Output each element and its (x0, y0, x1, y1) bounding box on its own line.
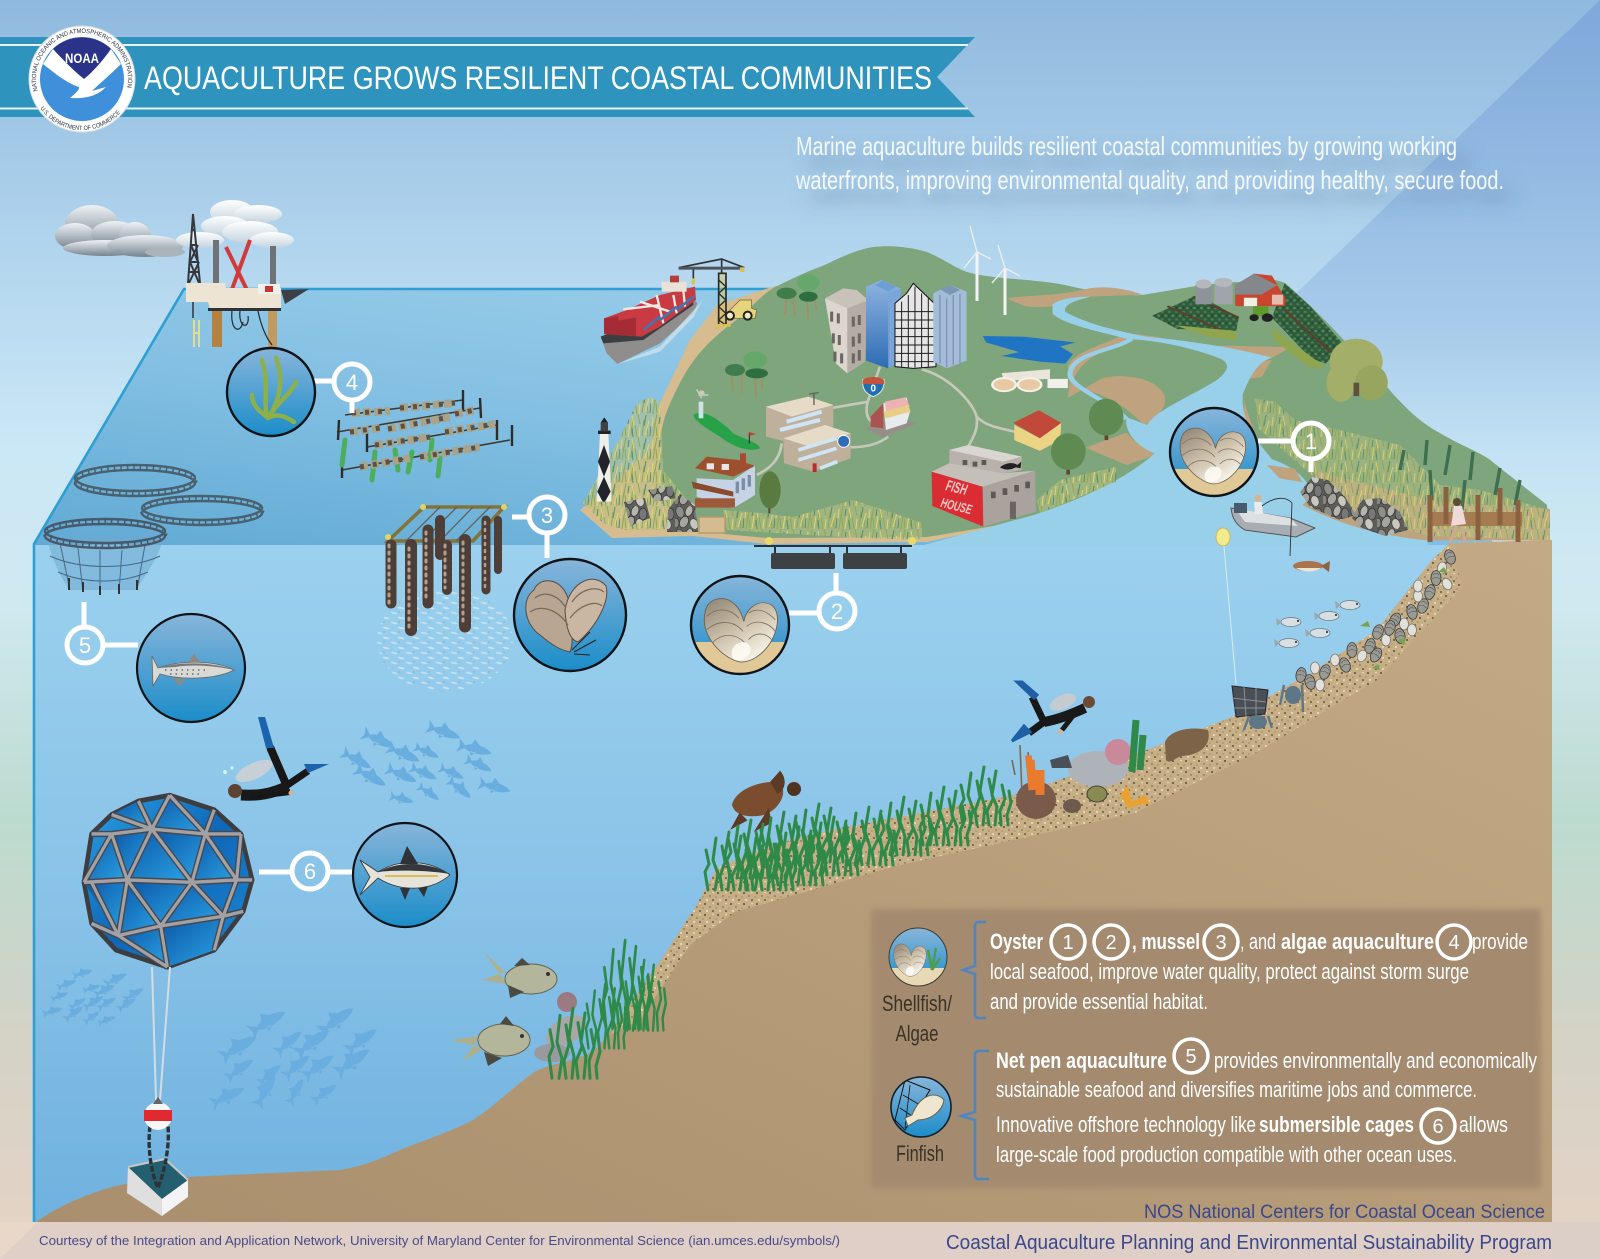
crane (679, 258, 744, 327)
wetland pond (983, 336, 1076, 364)
palm trees upper (777, 274, 820, 319)
badge 5: 5 (79, 633, 91, 658)
legend numerals bottom (1185, 1046, 1444, 1138)
tree: cypress (759, 471, 781, 513)
legend numerals top: 4 (1448, 932, 1460, 954)
dark reeds on right bank (1400, 440, 1520, 510)
legend number badges top (1051, 925, 1471, 959)
legend text: finfish: allows (1459, 1112, 1508, 1137)
legend label: shellfish algae (882, 991, 953, 1046)
oil rig platform (186, 214, 309, 347)
legend numerals bottom: 5 (1185, 1046, 1197, 1068)
mooring buoy (144, 1097, 172, 1130)
bottom credit band (0, 1222, 1600, 1259)
NOAA logo: U.S. DEPARTMENT OF COMMERCE (40, 106, 120, 130)
scuba diver left (223, 717, 329, 798)
badge 4: 4 (346, 370, 358, 395)
silos and barn (1195, 274, 1286, 306)
mussel raft (385, 504, 507, 541)
legend text: shellfish: Oyster (990, 929, 1043, 954)
cloud: white (176, 200, 294, 248)
fish house shore marsh (1037, 467, 1116, 513)
legend number badges bottom (1174, 1039, 1455, 1143)
badge 6: 6 (304, 859, 316, 884)
river mud flats (1007, 287, 1550, 540)
legend brace bottom (961, 1051, 989, 1179)
wind turbines (964, 226, 1020, 315)
interstate shield: 0 (871, 383, 877, 394)
legend label: shellfish algae: Shellfish/ (882, 991, 953, 1016)
legend text: shellfish: local seafood, improve water quality, protect against storm surge (990, 959, 1469, 984)
fish house: HOUSE (939, 495, 974, 517)
net pen front (45, 519, 165, 595)
palm trees lower (725, 351, 768, 397)
silver fish (1274, 600, 1360, 648)
buoy and crab pot line (1216, 528, 1268, 717)
connector lines (84, 381, 1311, 872)
bulldozer (726, 300, 757, 320)
container ship (601, 276, 702, 364)
skyscraper: blue (866, 280, 901, 368)
intro text (795, 131, 1504, 195)
fish school upper (339, 717, 513, 807)
green tractor (1249, 306, 1273, 322)
roads (757, 367, 1015, 475)
NOAA logo: NATIONAL OCEANIC AND ATMOSPHERIC ADMINISTRATION (32, 28, 132, 92)
credit: courtesy: Courtesy of the Integration and Application Network, University of Maryland Center for Environmental Science (ian.umces.edu/symbols/) (39, 1233, 840, 1248)
legend text: finfish: submersible cages (1259, 1112, 1414, 1137)
gravel band (610, 543, 1462, 1035)
waterfront house (692, 453, 755, 508)
pale forage fish school (377, 588, 513, 692)
small pier (699, 517, 725, 533)
legend text: shellfish: algae aquaculture (1281, 929, 1434, 954)
badge 6 (292, 853, 328, 889)
badge 3: 3 (541, 503, 553, 528)
legend brace top (963, 922, 986, 1018)
mooring block (127, 1159, 188, 1216)
lighthouse (597, 417, 612, 502)
mooring lines (152, 967, 170, 1100)
shop (865, 397, 917, 437)
credit: program: Coastal Aquaculture Planning and Environmental Sustainability Program (946, 1232, 1552, 1254)
oyster reef on river shore (1300, 477, 1408, 536)
legend text: finfish: Innovative offshore technology like (996, 1112, 1256, 1137)
legend text: shellfish: , mussel (1132, 929, 1200, 954)
legend text: finfish (996, 1048, 1537, 1167)
legend text: shellfish: , and (1240, 929, 1276, 954)
legend icon: finfish (891, 1077, 951, 1137)
willow tree (1327, 339, 1388, 402)
banner title text: AQUACULTURE GROWS RESILIENT COASTAL COMMUNITIES (144, 60, 932, 96)
badge 4 (334, 364, 370, 400)
legend numerals top: 1 (1062, 932, 1074, 954)
net pen back right (142, 496, 262, 525)
tree: right of house (1089, 399, 1123, 440)
mooring chain (149, 1126, 168, 1188)
island green hill (659, 246, 1550, 540)
legend text: shellfish: provide (1472, 929, 1528, 954)
fish school lower centre (207, 1000, 381, 1111)
red drum fish on line (1293, 561, 1330, 572)
hanging mussel ropes (389, 520, 498, 630)
net pen back left (75, 465, 195, 496)
fish house (932, 445, 1036, 527)
callout 5: salmon circle (137, 614, 245, 722)
background diagonal facet (1020, 0, 1600, 560)
flounder (1165, 728, 1209, 762)
NOAA logo (28, 26, 136, 132)
badge 1: 1 (1305, 429, 1317, 454)
NOAA logo: NOAA (65, 50, 99, 66)
callout 2: oyster circle (690, 576, 790, 678)
interstate shield (863, 377, 884, 397)
badge 1 (1293, 423, 1329, 459)
legend icon: shellfish algae (888, 928, 948, 988)
fish house: FISH (944, 477, 969, 499)
legend numerals bottom: 6 (1432, 1116, 1444, 1138)
callout 1: oyster circle (1170, 408, 1260, 499)
fish school lower left (41, 965, 146, 1027)
oyster reef on slope (1295, 548, 1457, 691)
island beach (580, 286, 1200, 544)
credit: NOS: NOS National Centers for Coastal Ocean Science (1144, 1202, 1545, 1223)
skyscraper: pale blue (933, 285, 967, 368)
seagrass meadow (705, 767, 1011, 890)
blue crabs (1244, 685, 1303, 730)
farm fields (1152, 283, 1343, 367)
skyscraper: glass (895, 283, 936, 368)
callout 3: mussel circle (514, 559, 626, 671)
oyster cages (754, 537, 916, 569)
legend label: finfish: Finfish (896, 1141, 944, 1166)
callout 6: amberjack circle (353, 823, 457, 927)
golfer and green (693, 389, 760, 450)
submersible geodesic cage (84, 795, 252, 967)
legend numerals top: 3 (1215, 932, 1227, 954)
legend label: shellfish algae: Algae (896, 1021, 938, 1046)
south shore marsh (723, 500, 922, 540)
legend text: shellfish (990, 929, 1528, 1014)
cloud: grey (55, 205, 185, 257)
triggerfish lower (450, 1016, 530, 1066)
sea turtle (732, 773, 801, 828)
water surface plane (34, 289, 1500, 545)
seabed ground (36, 540, 1552, 1222)
water treatment plant (992, 369, 1068, 391)
rocks and urchin (534, 992, 592, 1062)
callout 4: algae circle (227, 348, 315, 436)
skyscraper: grey (825, 288, 868, 373)
badge 2: 2 (831, 599, 843, 624)
algae longlines (337, 390, 512, 480)
legend text: finfish: Net pen aquaculture (996, 1048, 1167, 1073)
office buildings (766, 393, 851, 472)
legend text: finfish: large-scale food production compatible with other ocean uses. (996, 1142, 1457, 1167)
legend text: shellfish: and provide essential habitat. (990, 989, 1208, 1014)
dock with person (1428, 487, 1522, 542)
title banner (0, 37, 975, 117)
badge 3 (529, 497, 565, 533)
fishing boat (1231, 494, 1315, 556)
legend numerals top: 2 (1105, 932, 1117, 954)
river (922, 297, 1428, 545)
coral and rocks (1012, 720, 1150, 819)
rock oyster clusters west shore (624, 486, 698, 532)
triggerfish (482, 952, 557, 998)
yellow house (1013, 410, 1061, 451)
scuba diver right (1012, 682, 1095, 741)
badge 5 (67, 627, 103, 663)
badge 2 (819, 593, 855, 629)
legend panel (871, 909, 1541, 1188)
water column front face (34, 545, 1500, 1222)
legend numerals top (1062, 932, 1460, 954)
seagrass clump deep (549, 941, 666, 1078)
tree: lower (1051, 433, 1086, 475)
water box edges (34, 289, 800, 1222)
right bank tidal marsh (1254, 398, 1550, 540)
left shore marsh (583, 397, 690, 530)
